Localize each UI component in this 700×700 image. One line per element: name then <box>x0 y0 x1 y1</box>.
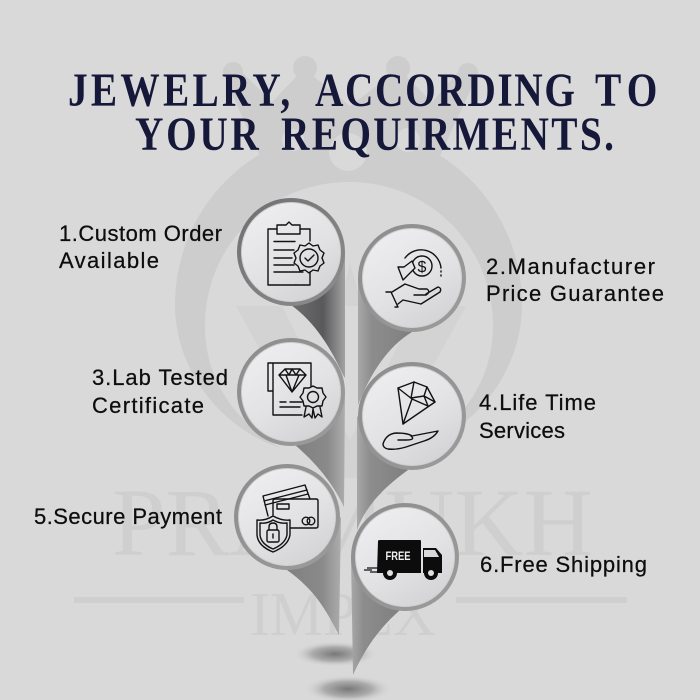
icon: free shipping truck: FREE <box>386 549 410 563</box>
label 3: Lab Tested Certificate: Certificate <box>92 393 204 418</box>
label 2: Manufacturer Price Guarantee: Price Guarantee <box>486 281 664 306</box>
title <box>68 64 657 161</box>
title line 1 <box>68 64 657 117</box>
step 2 badge <box>358 224 466 332</box>
title line 1: JEWELRY, <box>68 64 290 117</box>
ground shadow right <box>304 675 392 700</box>
pin tail 2 <box>358 278 412 405</box>
label 2: Manufacturer Price Guarantee <box>486 254 664 306</box>
step 6 badge <box>351 503 459 611</box>
label 2: Manufacturer Price Guarantee: 2.Manufacturer <box>486 254 655 279</box>
watermark wordmark: PRAMUKH <box>112 469 593 576</box>
step 4 badge <box>358 362 466 470</box>
pin tail 1 <box>291 252 345 378</box>
watermark sub-wordmark: IMPEX <box>250 581 436 649</box>
pin tail 3 <box>295 392 345 507</box>
title line 2: YOUR <box>135 108 260 161</box>
pin tail 5 <box>287 517 341 635</box>
label 1: Custom Order Available: Available <box>59 248 159 273</box>
watermark: brand logo <box>74 56 627 649</box>
ground shadow left <box>293 641 377 667</box>
step 5 badge <box>234 464 340 570</box>
label 1: Custom Order Available <box>59 221 222 273</box>
title line 1: ACCORDING <box>315 64 575 117</box>
pin tail 6 <box>351 557 400 675</box>
label 6: Free Shipping: 6.Free Shipping <box>480 552 647 577</box>
label 4: Life Time Services: 4.Life Time <box>479 390 596 415</box>
icon: clipboard with seal <box>268 222 324 285</box>
watermark rule left <box>74 597 244 603</box>
label 1: Custom Order Available: 1.Custom Order <box>59 221 222 246</box>
label 4: Life Time Services <box>479 390 596 443</box>
title line 2 <box>135 108 614 161</box>
label 4: Life Time Services: Services <box>479 418 565 443</box>
watermark crown <box>223 56 478 171</box>
icon: hand with dollar refund: $ <box>418 259 427 276</box>
icon: diamond over hand <box>383 382 438 449</box>
icon: diamond certificate <box>268 363 326 418</box>
label 3: Lab Tested Certificate: 3.Lab Tested <box>92 365 228 390</box>
step 3 badge <box>237 338 345 446</box>
pin tail 4 <box>357 416 408 530</box>
label 3: Lab Tested Certificate <box>92 365 228 418</box>
label 5: Secure Payment: 5.Secure Payment <box>34 504 222 529</box>
title line 2: REQUIRMENTS. <box>281 108 614 161</box>
watermark rule right <box>456 597 627 603</box>
watermark monogram <box>236 262 466 478</box>
step 1 badge <box>237 198 345 306</box>
title line 1: TO <box>595 64 657 117</box>
icon: cards with shield lock <box>257 485 318 552</box>
watermark ring <box>175 130 522 448</box>
